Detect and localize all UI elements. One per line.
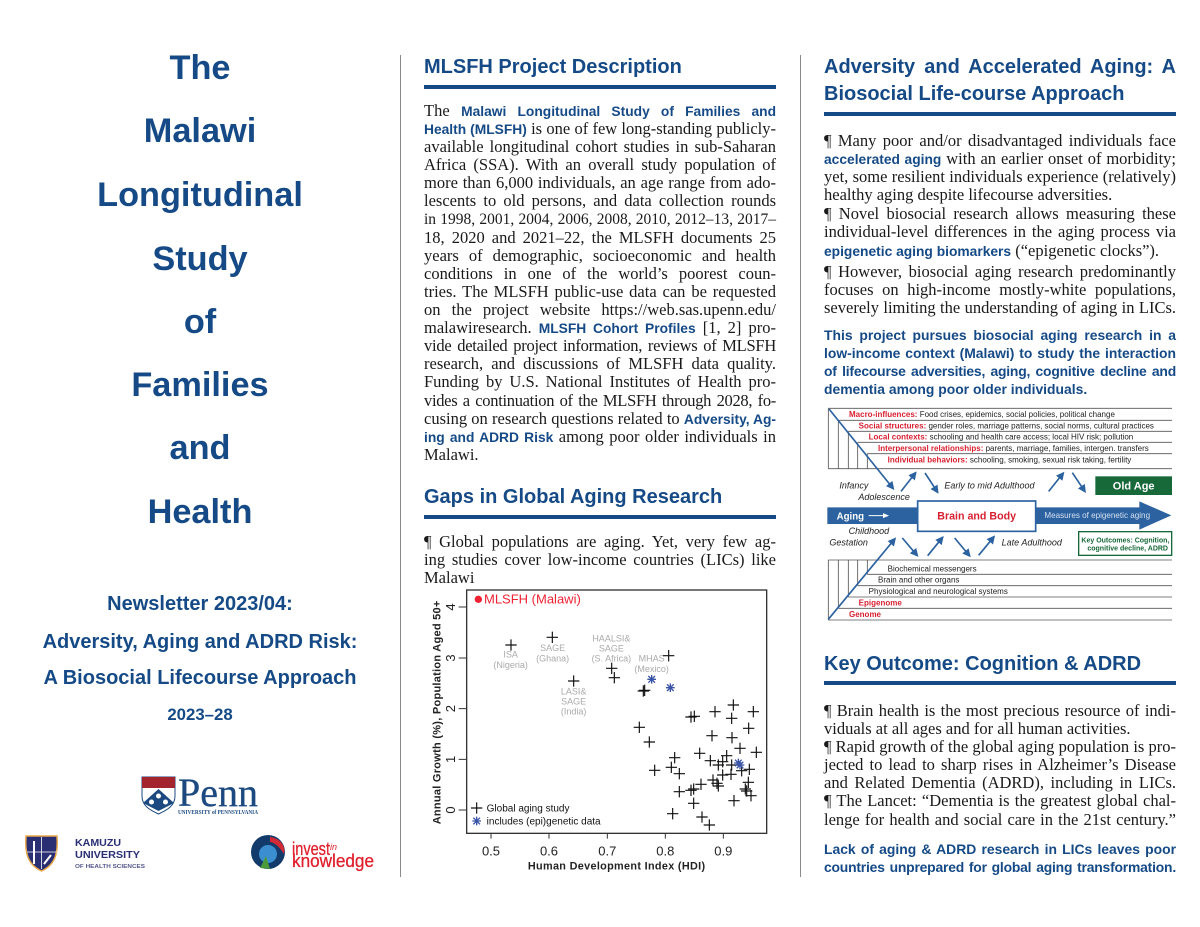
heading: adversity (824, 56, 1176, 105)
legend: includes (epi)genetic data (487, 816, 601, 827)
text: project description: ing and ADRD Risk among poor older individuals in (424, 427, 776, 446)
text: gaps: ing studies cover low-income countries (LICs) like (424, 550, 776, 569)
logo: invest in knowledge: in (330, 842, 337, 852)
text: key outcome (824, 701, 1176, 829)
callout: project aim: This project pursues biosocial aging research in a (824, 327, 1176, 343)
text: gaps: Malawi (424, 568, 474, 587)
logo: Kamuzu University: OF HEALTH SCIENCES (75, 864, 145, 870)
lower biological layers: Epigenome (859, 599, 902, 608)
upper context layers: Local contexts: schooling and health care access; local HIV risk; pollution (869, 433, 1133, 442)
title: of (184, 303, 216, 341)
text: project description: more than 6,000 individuals, an age range from ado- (424, 173, 776, 192)
text: project description: Africa (SSA). With an overall study population of (424, 155, 776, 174)
logo: Penn (142, 774, 258, 816)
life stage labels: Early to mid Adulthood (944, 481, 1036, 491)
study labels: (S. Africa) (592, 654, 631, 664)
text: key outcome: jected to lead to sharp rises in Alzheimer’s Disease (824, 755, 1176, 774)
text: gaps: ¶ Global populations are aging. Yet, very few ag- (424, 532, 776, 551)
callout: project aim (824, 327, 1176, 397)
callout: research gap: Lack of aging & ADRD research in LICs leaves poor (824, 841, 1176, 857)
brain and body box: Brain and Body (937, 511, 1016, 523)
text: project description: tries. The MLSFH public-use data can be requested (424, 282, 776, 301)
study labels: (Nigeria) (493, 660, 528, 670)
text: key outcome: ¶ Rapid growth of the global aging population is pro- (824, 737, 1176, 756)
study labels (493, 634, 669, 717)
title: and (170, 429, 230, 467)
text: project description: in 1998, 2001, 2004, 2006, 2008, 2010, 2012–13, 2017– (424, 211, 776, 228)
life stage labels: Infancy (839, 481, 869, 491)
axis labels: Human Development Index (HDI) (528, 861, 705, 873)
axis labels: Annual Growth (%), Population Aged 50+ (431, 600, 443, 824)
old age box: Old Age (1113, 480, 1155, 492)
text: project description: lescents to old persons, and data collection rounds (424, 191, 776, 210)
callout: research gap: countries unprepared for global aging transformation. (824, 859, 1176, 875)
study labels: SAGE (561, 697, 586, 707)
text: adversity: focuses on high-income mostly-white populations, (824, 280, 1176, 299)
logo: Kamuzu University (25, 835, 145, 872)
axis labels (431, 600, 732, 873)
study labels: MHAS (639, 654, 665, 664)
old age box (1095, 476, 1172, 495)
text: project description (424, 101, 776, 464)
text: adversity: ¶ Novel biosocial research allows measuring these (824, 204, 1176, 223)
life stage labels: Gestation (829, 538, 868, 548)
newsletter subtitle (43, 593, 357, 724)
brain and body box (918, 501, 1036, 531)
heading: adversity: Adversity and Accelerated Aging: A (824, 56, 1176, 78)
text: key outcome: lenge for health and social care in the 21st century.” (824, 810, 1176, 829)
upper context layers: Social structures: gender roles, marriage patterns, social norms, cultural practices (859, 421, 1154, 430)
text: project description: Health (MLSFH) is one of few long-standing publicly- (424, 119, 776, 138)
axis labels: 0.9 (714, 844, 732, 859)
data points (505, 632, 762, 831)
title: Longitudinal (97, 176, 303, 214)
title: Study (152, 240, 248, 278)
study labels: HAALSI& (592, 634, 630, 644)
axis labels: 4 (443, 603, 458, 611)
text: project description: cusing on research questions related to Adversity, Ag- (424, 409, 776, 428)
newsletter subtitle: Newsletter 2023/04: (107, 593, 293, 615)
heading: gaps: Gaps in Global Aging Research (424, 486, 722, 508)
logo: Kamuzu University: KAMUZU (75, 837, 121, 849)
key outcomes box: cognitive decline, ADRD (1087, 546, 1168, 553)
study labels: (Ghana) (536, 653, 569, 663)
text: project description: Malawi. (424, 445, 479, 464)
callout: research gap (824, 841, 1176, 875)
text: project description: years of demographic, socioeconomic and health (424, 246, 776, 265)
title: Health (148, 493, 252, 531)
axis labels: 1 (443, 756, 458, 763)
text: adversity: yet, some resilient individuals experience (relatively) (824, 167, 1176, 186)
title (97, 49, 303, 531)
text: adversity: ¶ However, biosocial aging research predominantly (824, 262, 1176, 281)
life stage labels (829, 481, 1063, 548)
axis labels: 0.8 (656, 844, 674, 859)
text: key outcome: and Related Dementia (ADRD), including in LICs. (824, 773, 1176, 792)
axis labels: 0.7 (598, 844, 616, 859)
upper context layers: Macro-influences: Food crises, epidemics, social policies, political change (849, 410, 1115, 419)
logo: invest in knowledge (251, 835, 374, 872)
aging arrow: Measures of epigenetic aging (1044, 511, 1150, 520)
title: The (170, 49, 230, 87)
heading: adversity: Biosocial Life-course Approach (824, 83, 1124, 105)
axis labels: 3 (443, 654, 458, 662)
text: adversity: epigenetic aging biomarkers (“epigenetic clocks”). (824, 241, 1159, 260)
lower biological layers: Genome (849, 610, 882, 619)
text: project description: conditions in one of the world’s poorest coun- (424, 264, 776, 283)
text: adversity: ¶ Many poor and/or disadvantaged individuals face (824, 131, 1176, 150)
axis labels: 0 (443, 806, 458, 814)
newsletter subtitle: Adversity, Aging and ADRD Risk: (43, 631, 357, 653)
lower biological layers (828, 560, 1172, 620)
MLSFH marker: MLSFH (Malawi) (484, 591, 581, 606)
logo: Kamuzu University: UNIVERSITY (75, 849, 140, 861)
text: project description: Funding by U.S. National Institutes of Health pro- (424, 372, 776, 391)
text: project description: malawiresearch. MLSFH Cohort Profiles [1, 2] pro- (424, 318, 776, 337)
newsletter subtitle: 2023–28 (167, 705, 233, 724)
legend (471, 802, 601, 827)
aging arrow (827, 501, 1171, 530)
text: key outcome: ¶ Brain health is the most precious resource of indi- (824, 701, 1176, 720)
text: gaps (424, 532, 776, 587)
axis labels: 0.5 (482, 844, 500, 859)
axis ticks (459, 607, 723, 839)
life stage labels: Late Adulthood (1002, 538, 1063, 548)
key outcomes box: Key Outcomes: Cognition, (1081, 537, 1169, 544)
lower biological layers: Biochemical messengers (888, 565, 977, 574)
heading: project description: MLSFH Project Description (424, 56, 682, 78)
text: key outcome: ¶ The Lancet: “Dementia is the greatest global chal- (824, 791, 1176, 810)
text: project description: on the project website https://web.sas.upenn.edu/ (424, 300, 776, 319)
text: adversity: individual-level differences in the aging process via (824, 222, 1176, 241)
title: Malawi (144, 112, 256, 150)
key outcomes box (1079, 532, 1172, 555)
upper context layers: Individual behaviors: schooling, smoking, sexual risk taking, fertility (888, 455, 1131, 464)
upper context layers (828, 408, 1172, 469)
text: key outcome: viduals at all ages and for all human activities. (824, 719, 1131, 738)
logo: invest in knowledge: knowledge (292, 851, 374, 871)
text: adversity: severely limiting the understanding of aging in LICs. (824, 298, 1176, 317)
axis labels: 2 (443, 705, 458, 712)
life stage labels: Childhood (849, 526, 890, 536)
life stage labels: Adolescence (857, 492, 910, 502)
scatter plot (431, 589, 768, 873)
axis labels: 0.6 (540, 844, 558, 859)
study labels: ISA (503, 650, 518, 660)
lower biological layers: Physiological and neurological systems (869, 587, 1008, 596)
study labels: LASI& (561, 686, 586, 696)
pathway arrows (828, 409, 1085, 619)
text: adversity: healthy aging despite lifecourse adversities. (824, 185, 1112, 204)
text: adversity: accelerated aging with an earlier onset of morbidity; (824, 149, 1176, 168)
title: Families (131, 366, 269, 404)
legend: Global aging study (487, 803, 570, 814)
text: project description: research, and discussions of MLSFH data quality. (424, 354, 776, 373)
lower biological layers: Brain and other organs (878, 576, 959, 585)
study labels: (Mexico) (634, 664, 669, 674)
text: project description: The Malawi Longitudinal Study of Families and (424, 101, 776, 120)
callout: project aim: dementia among poor older individuals. (824, 381, 1087, 397)
text: adversity (824, 131, 1176, 317)
text: project description: vides a continuation of the MLSFH through 2028, fo- (424, 390, 776, 410)
text: project description: vide detailed project information, reviews of MLSFH (424, 336, 776, 355)
callout: project aim: of lifecourse adversities, aging, cognitive decline and (824, 363, 1176, 379)
text: project description: 18, 2020 and 2021–22, the MLSFH documents 25 (424, 228, 776, 247)
life-course diagram (827, 408, 1172, 620)
study labels: (India) (561, 707, 586, 717)
newsletter subtitle: A Biosocial Lifecourse Approach (43, 667, 357, 689)
logo: invest in knowledge: invest (292, 839, 330, 859)
study labels: SAGE (540, 643, 565, 653)
upper context layers: Interpersonal relationships: parents, marriage, families, intergen. transfers (878, 444, 1149, 453)
study labels: SAGE (599, 644, 624, 654)
aging arrow: Aging (837, 511, 864, 522)
heading: key outcome: Key Outcome: Cognition & ADRD (824, 653, 1141, 675)
callout: project aim: low-income context (Malawi) to study the interaction (824, 345, 1176, 361)
text: project description: available longitudinal cohort studies in sub-Saharan (424, 137, 776, 156)
